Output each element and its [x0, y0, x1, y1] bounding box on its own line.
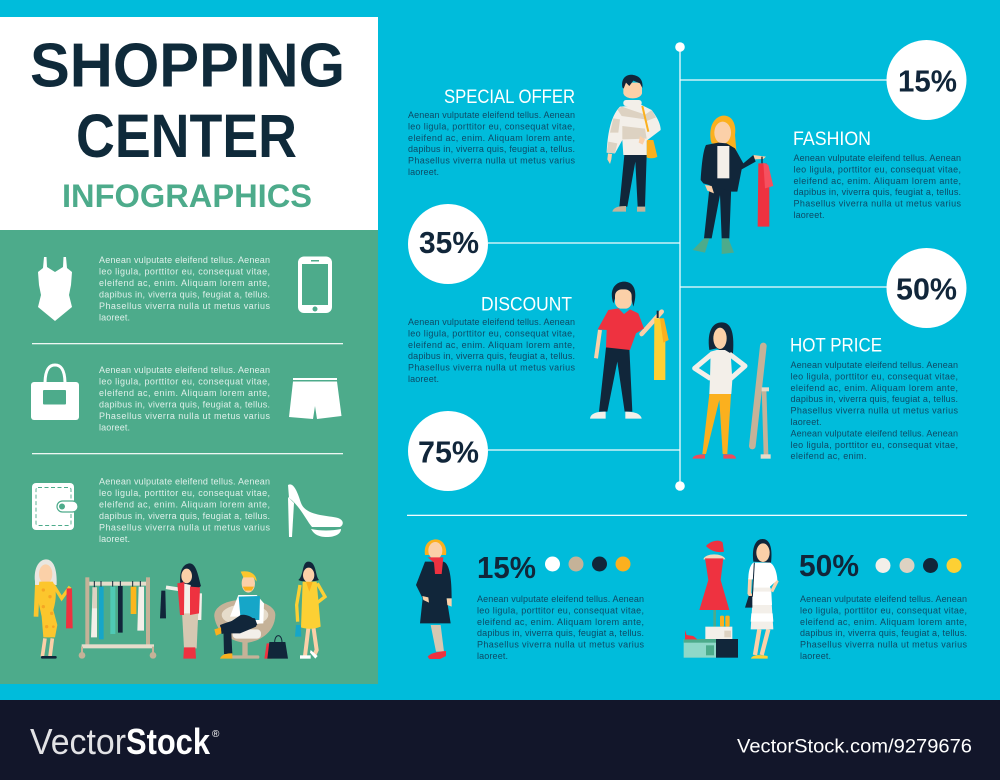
text block: bottom right: Phasellus viverra nulla ut metus varius — [800, 640, 968, 650]
figure: man holding yellow garment — [590, 282, 669, 419]
icon: swimsuit — [38, 257, 72, 321]
text block: special offer: laoreet. — [408, 167, 439, 177]
text block: special offer — [408, 110, 576, 177]
callout: 35% — [408, 204, 488, 284]
stat: 15%: 15% — [477, 550, 536, 585]
text block: product text 3: leo ligula, porttitor eu, consequat vitae, — [99, 488, 270, 498]
text block: special offer: Aenean vulputate eleifend tellus. Aenean — [408, 110, 575, 120]
text block: fashion: laoreet. — [794, 210, 824, 220]
text block: bottom left: leo ligula, porttitor eu, consequat vitae, — [477, 605, 644, 615]
text block: hot price: eleifend ac, enim. — [790, 451, 866, 461]
text block: hot price: leo ligula, porttitor eu, consequat vitae, — [790, 371, 958, 381]
icon: shorts — [289, 378, 342, 419]
text block: product text 1: eleifend ac, enim. Aliquam lorem ante, — [99, 278, 270, 288]
heading: special offer: SPECIAL OFFER — [444, 87, 575, 108]
heading: discount: DISCOUNT — [481, 295, 572, 316]
text block: hot price: dapibus in, viverra quis, feugiat a, tellus. — [790, 394, 958, 404]
figure: seated man in chair — [214, 571, 288, 659]
text block: hot price: leo ligula, porttitor eu, consequat vitae, — [790, 440, 958, 450]
woman in white dress — [745, 539, 777, 659]
text block: product text 1: dapibus in, viverra quis, feugiat a, tellus. — [99, 290, 270, 300]
text block: product text 2 — [99, 365, 270, 432]
figure: dress mannequin, boxes and woman — [684, 539, 777, 659]
icon: shopping bags — [264, 636, 288, 659]
text block: bottom left: laoreet. — [477, 651, 508, 661]
callout: 50%: 50% — [896, 271, 957, 306]
text block: bottom left: dapibus in, viverra quis, feugiat a, tellus. — [477, 628, 644, 638]
icon: high heel — [288, 484, 343, 537]
text block: bottom right — [800, 594, 968, 661]
text block: special offer: dapibus in, viverra quis, feugiat a, tellus. — [408, 144, 575, 154]
text block: bottom left: eleifend ac, enim. Aliquam lorem ante, — [477, 617, 644, 627]
text block: special offer: leo ligula, porttitor eu, consequat vitae, — [408, 121, 575, 131]
footer bar: VectorStock.com/9279676 — [737, 736, 972, 758]
figure: woman in yellow dress with bag — [295, 562, 325, 659]
text block: product text 1 — [99, 255, 270, 322]
figure: man with shoulder bag — [607, 75, 661, 212]
text block: bottom right: eleifend ac, enim. Aliquam lorem ante, — [800, 617, 967, 627]
text block: fashion: dapibus in, viverra quis, feugiat a, tellus. — [794, 187, 961, 197]
text block: product text 1: leo ligula, porttitor eu, consequat vitae, — [99, 266, 270, 276]
title — [30, 32, 345, 214]
text block: discount: eleifend ac, enim. Aliquam lorem ante, — [408, 340, 575, 350]
text block: product text 2: dapibus in, viverra quis, feugiat a, tellus. — [99, 400, 270, 410]
figure: woman in dark coat — [416, 539, 452, 659]
title: CENTER — [76, 102, 297, 170]
text block: hot price: Aenean vulputate eleifend tellus. Aenean — [790, 428, 958, 438]
title: INFOGRAPHICS — [62, 178, 312, 214]
text block: fashion: Phasellus viverra nulla ut metus varius — [794, 199, 962, 209]
text block: product text 1: laoreet. — [99, 312, 130, 322]
text block: special offer: Phasellus viverra nulla ut metus varius — [408, 156, 576, 166]
text block: fashion: Aenean vulputate eleifend tellus. Aenean — [794, 153, 961, 163]
text block: special offer: eleifend ac, enim. Aliquam lorem ante, — [408, 133, 575, 143]
icon: wallet — [32, 483, 78, 530]
icon: smartphone — [298, 256, 332, 313]
text block: product text 3: Aenean vulputate eleifend tellus. Aenean — [99, 476, 270, 486]
panel: green product panel — [0, 230, 378, 684]
text block: fashion: leo ligula, porttitor eu, consequat vitae, — [794, 164, 961, 174]
text block: bottom left — [477, 594, 644, 661]
text block: hot price: laoreet. — [790, 417, 822, 427]
stat: 50%: 50% — [799, 548, 859, 583]
title: SHOPPING — [30, 32, 345, 100]
figure: woman with red garment — [693, 116, 773, 254]
text block: product text 3: laoreet. — [99, 534, 130, 544]
text block: fashion — [794, 153, 962, 220]
illustration: shoppers scene — [35, 559, 325, 659]
text block: bottom right: laoreet. — [800, 651, 831, 661]
text block: product text 1: Phasellus viverra nulla ut metus varius — [99, 301, 270, 311]
text block: product text 1: Aenean vulputate eleifend tellus. Aenean — [99, 255, 270, 265]
figure: woman with vest — [160, 563, 201, 659]
text block: fashion: eleifend ac, enim. Aliquam lorem ante, — [794, 176, 961, 186]
heading: hot price: HOT PRICE — [790, 336, 882, 357]
text block: discount: Aenean vulputate eleifend tellus. Aenean — [408, 317, 575, 327]
heading: fashion: FASHION — [793, 129, 871, 150]
text block: bottom left: Phasellus viverra nulla ut metus varius — [477, 640, 644, 650]
callout: 35%: 35% — [419, 225, 479, 260]
text block: product text 2: Phasellus viverra nulla ut metus varius — [99, 411, 270, 421]
color swatches: 50% — [876, 558, 962, 573]
text block: hot price: Phasellus viverra nulla ut metus varius — [790, 406, 958, 416]
callout: 50% — [886, 248, 966, 328]
callout: 75% — [408, 411, 488, 491]
text block: product text 2: leo ligula, porttitor eu, consequat vitae, — [99, 376, 270, 386]
figure: clothes rack — [79, 577, 156, 659]
text block: hot price: eleifend ac, enim. Aliquam lorem ante, — [790, 383, 958, 393]
text block: bottom left: Aenean vulputate eleifend tellus. Aenean — [477, 594, 644, 604]
footer bar — [0, 700, 1000, 780]
icon: handbag — [31, 365, 79, 420]
text block: discount: Phasellus viverra nulla ut metus varius — [408, 363, 576, 373]
footer bar: ® — [212, 729, 220, 740]
text block: discount: leo ligula, porttitor eu, consequat vitae, — [408, 328, 575, 338]
footer bar: Stock — [126, 721, 211, 762]
text block: product text 2: eleifend ac, enim. Aliquam lorem ante, — [99, 388, 270, 398]
text block: bottom right: leo ligula, porttitor eu, consequat vitae, — [800, 605, 967, 615]
text block: product text 3: Phasellus viverra nulla ut metus varius — [99, 522, 270, 532]
text block: product text 3: dapibus in, viverra quis, feugiat a, tellus. — [99, 511, 270, 521]
callout: 15%: 15% — [898, 64, 957, 98]
figure: woman in yellow dress — [35, 559, 73, 659]
callout: 75%: 75% — [418, 435, 479, 470]
text block: discount: laoreet. — [408, 374, 439, 384]
color swatches: 15% — [545, 556, 630, 572]
figure: woman at mirror — [692, 322, 771, 459]
text block: discount: dapibus in, viverra quis, feugiat a, tellus. — [408, 351, 575, 361]
text block: bottom right: Aenean vulputate eleifend tellus. Aenean — [800, 594, 967, 604]
text block: discount — [408, 317, 576, 384]
timeline: vertical axis with branches — [488, 42, 890, 491]
panel: title background — [0, 17, 378, 230]
text block: bottom right: dapibus in, viverra quis, feugiat a, tellus. — [800, 628, 967, 638]
footer bar: Vector — [30, 721, 126, 762]
text block: product text 3: eleifend ac, enim. Aliquam lorem ante, — [99, 500, 270, 510]
text block: hot price — [790, 360, 958, 461]
text block: product text 2: laoreet. — [99, 422, 130, 432]
text block: product text 2: Aenean vulputate eleifend tellus. Aenean — [99, 365, 270, 375]
mannequin with boxes — [684, 541, 738, 658]
text block: product text 3 — [99, 476, 270, 544]
text block: hot price: Aenean vulputate eleifend tellus. Aenean — [790, 360, 958, 370]
callout: 15% — [886, 40, 966, 120]
